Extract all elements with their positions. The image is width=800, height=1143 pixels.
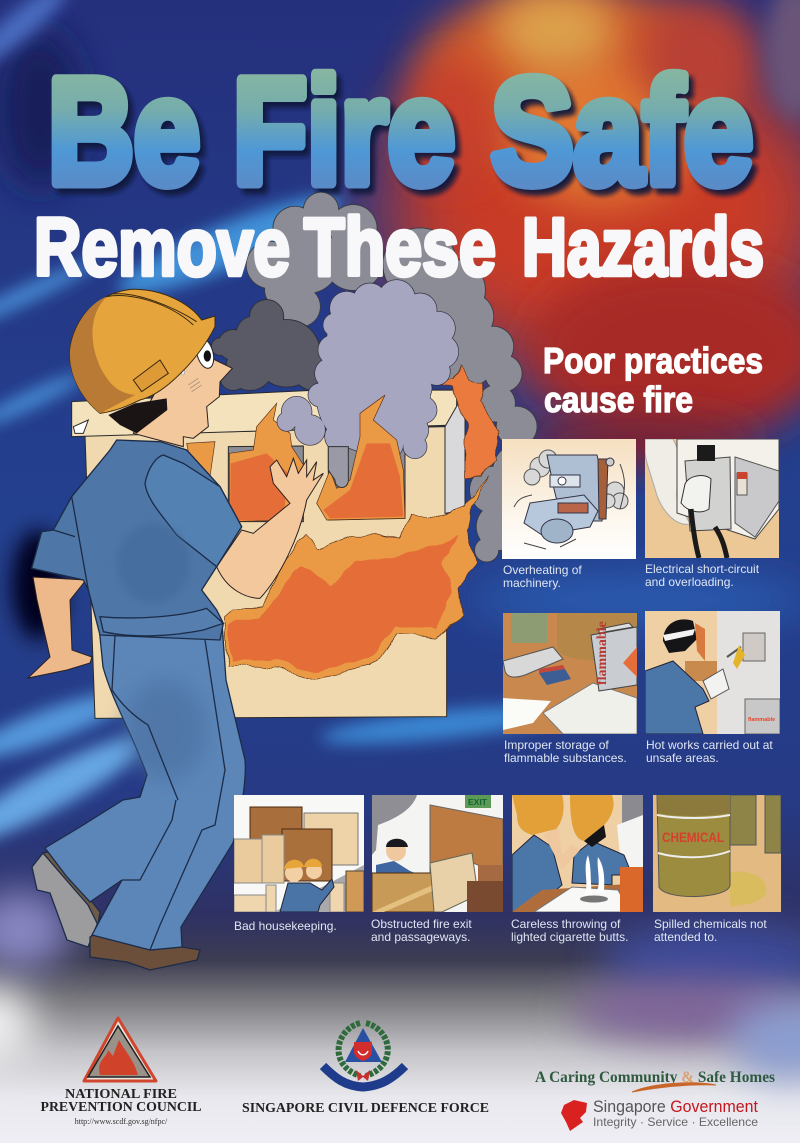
flames [187, 363, 498, 678]
icon: wreath and crest [323, 1023, 405, 1087]
heading: Remove These Hazards: Remove [34, 202, 290, 293]
panel: spilled chemicals: CHEMICAL [662, 829, 724, 845]
smoke clouds [212, 193, 547, 562]
trousers [45, 605, 245, 950]
logo: Caring Community and Singapore Government [535, 1069, 775, 1131]
title: Be Fire Safe: Fire [233, 47, 455, 215]
caption: Obstructed fire exit [371, 917, 472, 931]
icon: flame triangle [84, 1018, 156, 1081]
front boot [90, 934, 200, 970]
building wall [72, 390, 465, 718]
caption: Overheating of [503, 563, 582, 577]
title shadow: Be [53, 53, 205, 221]
icon: lion head [561, 1100, 587, 1131]
logo: National Fire Prevention Council: PREVENTION COUNCIL [40, 1100, 202, 1115]
title shadow [53, 53, 758, 221]
caption: lighted cigarette butts. [511, 930, 628, 944]
panel: improper storage of flammable substances [503, 613, 637, 765]
caption: Improper storage of [504, 738, 609, 752]
panel: electrical short-circuit [645, 439, 779, 589]
hair [108, 398, 167, 433]
window flame right [317, 395, 405, 520]
caption: machinery. [503, 576, 561, 590]
logo: National Fire Prevention Council [40, 1018, 202, 1126]
panel: overheating of machinery [502, 439, 636, 590]
hard hat [70, 289, 215, 413]
heading: Remove These Hazards: These [304, 202, 496, 293]
caption: and passageways. [371, 930, 470, 944]
title: Be Fire Safe: Be [48, 47, 200, 215]
subheading: Poor practices cause fire: Poor practices [543, 340, 763, 381]
logo: National Fire Prevention Council: http://www.scdf.gov.sg/nfpc/ [75, 1117, 168, 1126]
title: Be Fire Safe [48, 47, 758, 221]
logo: Singapore Civil Defence Force: SINGAPORE CIVIL DEFENCE FORCE [242, 1101, 489, 1116]
caption: unsafe areas. [646, 751, 719, 765]
main smoke plume [277, 280, 458, 460]
caption: Electrical short-circuit [645, 562, 759, 576]
coverall torso and sleeves [32, 440, 242, 640]
logo: Caring Community and Singapore Government: Integrity · Service · Excellence [593, 1115, 758, 1129]
panel: hot works at unsafe areas [645, 611, 780, 765]
panel: improper storage of flammable substances: flammable [595, 621, 610, 685]
caption: attended to. [654, 930, 717, 944]
caption: Bad housekeeping. [234, 919, 337, 933]
rear arm and hand [28, 577, 92, 678]
heading: Remove These Hazards [34, 202, 764, 293]
panel: spilled chemicals [653, 795, 781, 944]
panel: bad housekeeping [234, 795, 364, 933]
caption: and overloading. [645, 575, 734, 589]
sole of rear boot [32, 853, 100, 947]
logo: Caring Community and Singapore Government: Singapore Government [593, 1097, 758, 1116]
caption: Hot works carried out at [646, 738, 773, 752]
eye [181, 336, 217, 392]
title shadow: Fire [238, 53, 460, 221]
panel: careless cigarette butts [511, 795, 643, 944]
front arm and hand [217, 458, 323, 598]
legs and boots [32, 605, 245, 970]
panel: obstructed fire exit: EXIT [468, 797, 488, 807]
title: Be Fire Safe: Safe [491, 47, 753, 215]
illustration: burning building [72, 193, 547, 718]
panel: obstructed fire exit [371, 795, 503, 944]
caption: flammable substances. [504, 751, 627, 765]
logo: Singapore Civil Defence Force [242, 1023, 489, 1116]
logo: Caring Community and Singapore Government: A Caring Community & Safe Homes [535, 1069, 775, 1086]
subheading: Poor practices cause fire: cause fire [544, 379, 693, 420]
panel: hot works at unsafe areas: flammable [748, 717, 775, 723]
logo: National Fire Prevention Council: NATIONAL FIRE [65, 1087, 177, 1102]
worker figure [28, 289, 323, 970]
subheading: Poor practices cause fire [543, 340, 763, 420]
head [133, 340, 232, 447]
caption: Careless throwing of [511, 917, 620, 931]
caption: Spilled chemicals not [654, 917, 767, 931]
